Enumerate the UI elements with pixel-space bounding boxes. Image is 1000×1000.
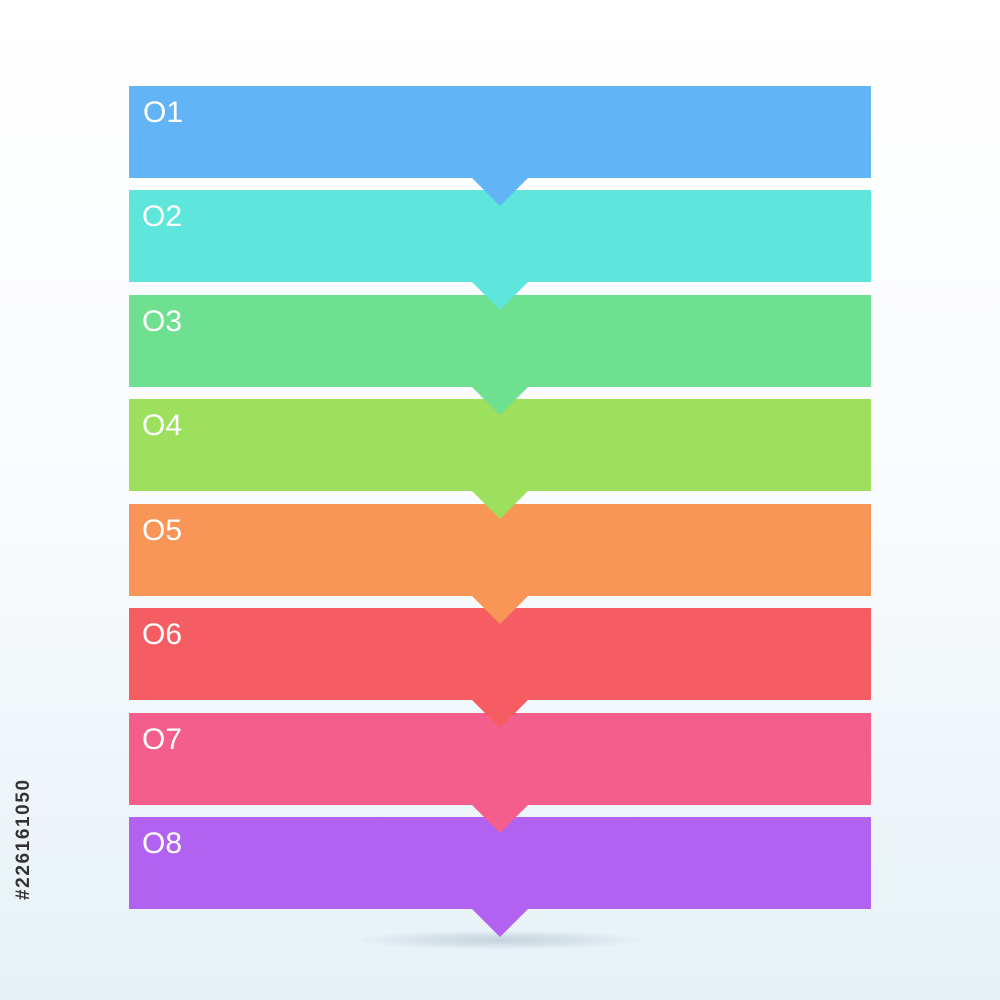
step 2: O2 [142, 200, 182, 233]
step 8 [129, 817, 871, 937]
step 3 [129, 295, 871, 415]
step 3: O3 [142, 305, 182, 338]
step 7 [129, 713, 871, 833]
step 4: O4 [142, 409, 182, 442]
step 8: O8 [142, 827, 182, 860]
step 2 [129, 190, 871, 310]
ground shadow [350, 930, 650, 950]
step 1 [129, 86, 871, 206]
step 5: O5 [142, 514, 182, 547]
step 5 [129, 504, 871, 624]
step 6: O6 [142, 618, 182, 651]
step 1: O1 [143, 96, 183, 129]
step 7: O7 [142, 723, 182, 756]
step 4 [129, 399, 871, 519]
step 6 [129, 608, 871, 728]
side id text: #226161050 [13, 778, 34, 900]
